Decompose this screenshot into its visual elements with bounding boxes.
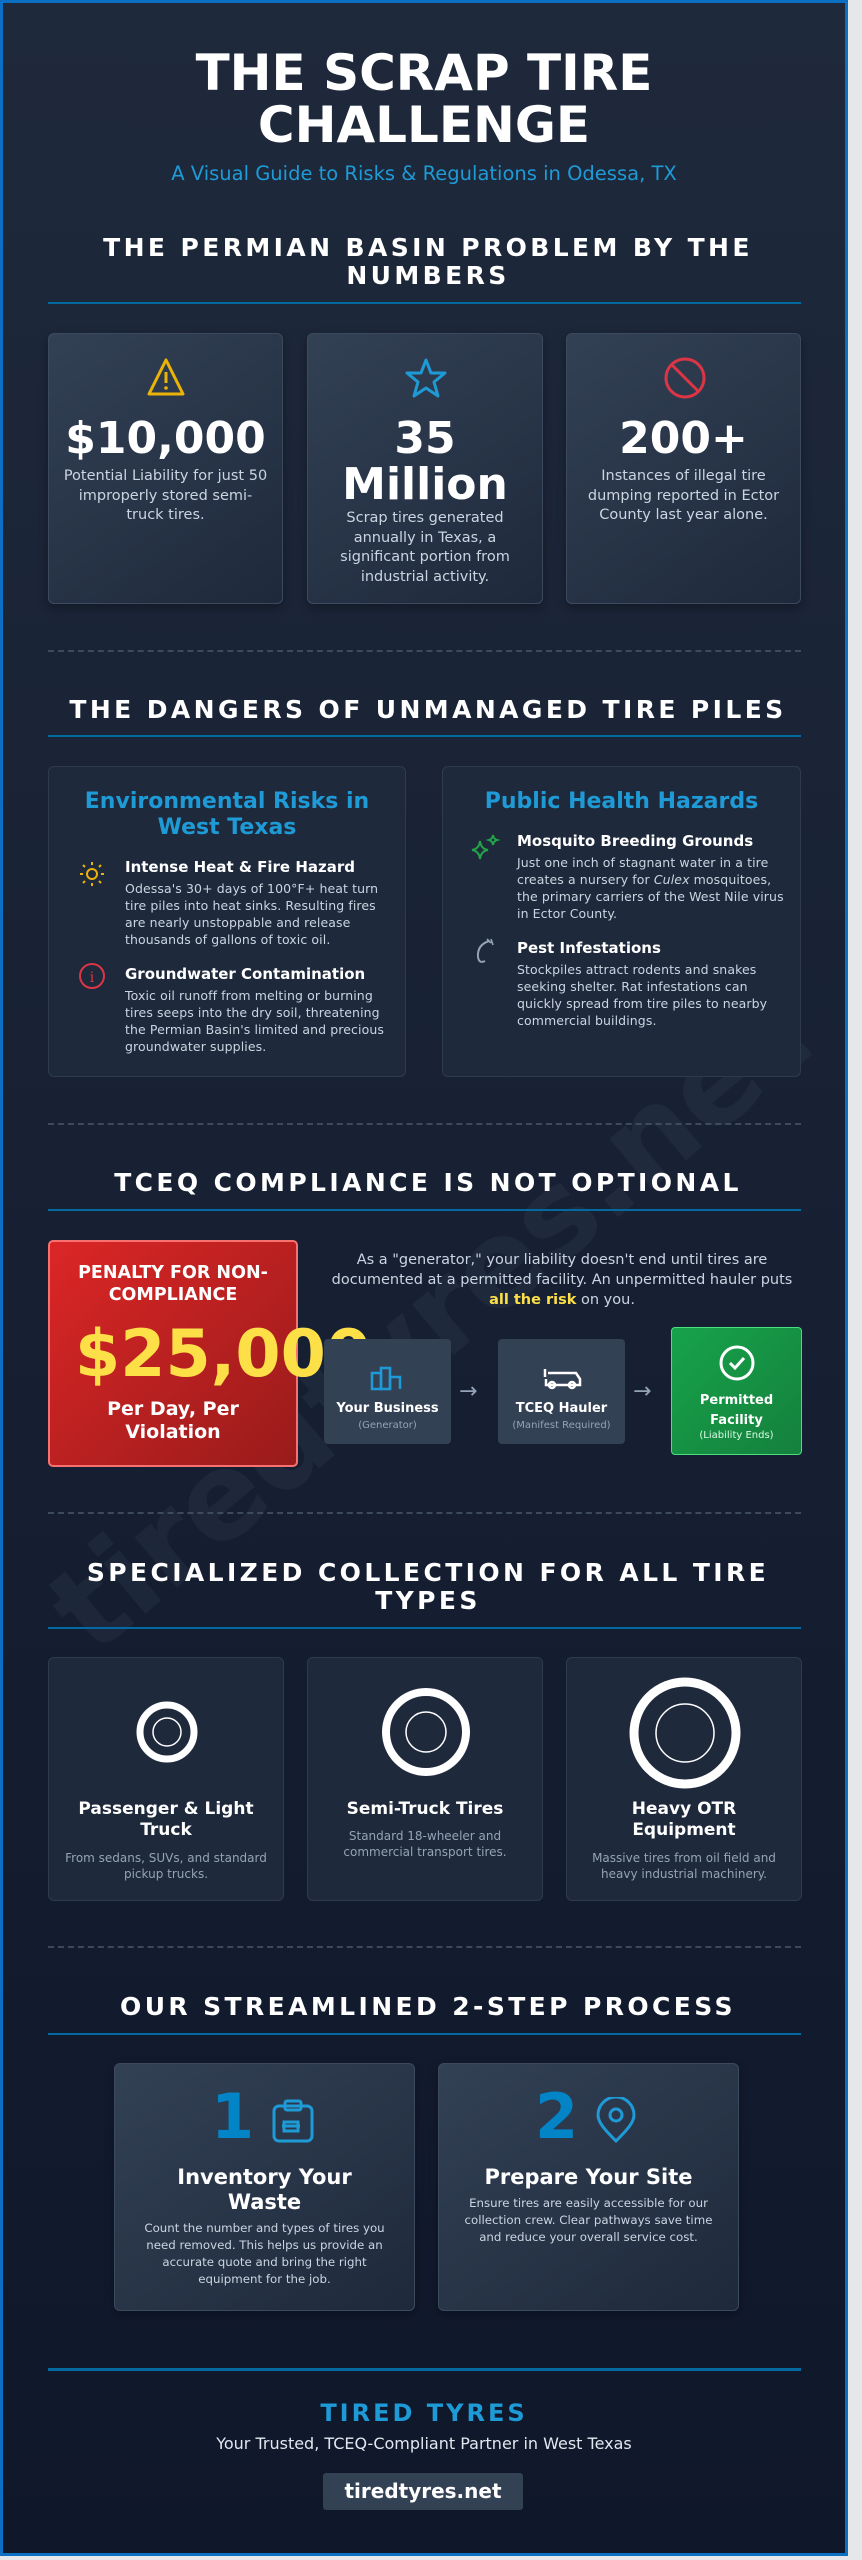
footer line [48,2368,801,2371]
tire card: passenger: From sedans, SUVs, and standard pickup trucks. [65,1851,267,1881]
panel: environmental: Groundwater Contamination [125,965,365,983]
icon: sparkles [472,834,500,860]
icon: building [370,1366,402,1390]
heading: numbers: THE PERMIAN BASIN PROBLEM BY THE NUMBERS [103,233,753,290]
icon: clipboard [272,2100,314,2142]
panel: environmental: Toxic oil runoff from melting or burning tires seeps into the dry soil, threatening the Permian Basin's limited and precious groundwater supplies. [125,988,384,1054]
tire card: passenger [48,1657,284,1901]
step 1: Waste [228,2190,301,2214]
footer: brand: TIRED TYRES [320,2399,528,2427]
arrow: → [633,1379,651,1404]
step 1: Inventory Your [177,2165,352,2189]
tire card: passenger: Passenger & Light [78,1799,254,1819]
footer: url pill: tiredtyres.net [344,2479,502,2503]
tire card: semi: Standard 18-wheeler and commercial transport tires. [343,1829,507,1859]
panel: health: Stockpiles attract rodents and snakes seeking shelter. Rat infestations can quickly spread from tire piles to nearby commercial buildings. [517,962,767,1028]
stat card 1: Potential Liability for just 50 improperly stored semi-truck tires. [64,468,267,523]
panel: environmental: Odessa's 30+ days of 100°F+ heat turn tire piles into heat sinks. Resulting fires are nearly unstoppable and release thousands of gallons of toxic oil. [125,881,378,947]
penalty box: PENALTY FOR NON- [78,1263,268,1283]
stat card 3 [566,333,801,604]
icon: small tire [136,1702,198,1762]
step 1: Count the number and types of tires you need removed. This helps us provide an accurate quote and bring the right equipment for the job. [144,2221,385,2286]
flow: business: (Generator) [358,1420,417,1431]
panel: health: Public Health Hazards [485,789,758,814]
stat card 2 [307,333,543,604]
arrow: → [459,1379,477,1404]
panel: environmental [48,766,406,1077]
flow: hauler: TCEQ Hauler [516,1401,607,1416]
penalty amount: $25,000 [75,1317,371,1392]
panel: environmental: West Texas [158,815,296,840]
paragraph: As a "generator," your liability doesn't end until tires are documented at a permitted facility. An unpermitted hauler puts all the risk on you. [332,1252,792,1308]
icon: warning [148,358,184,396]
tire card: OTR [566,1657,802,1901]
panel: health: Just one inch of stagnant water in a tire creates a nursery for Culex mosquitoes, the primary carriers of the West Nile virus in Ector County. [517,855,784,921]
heading: dangers: THE DANGERS OF UNMANAGED TIRE PILES [69,695,787,724]
icon: medium tire [382,1688,470,1776]
icon: truck [544,1369,582,1390]
icon: pest [476,938,494,963]
footer: url pill [323,2473,523,2510]
panel: environmental: Environmental Risks in [85,789,369,814]
step 2: Prepare Your Site [484,2165,693,2189]
icon: large tire [630,1678,740,1788]
title: THE SCRAP TIRE [196,44,652,102]
icon: info [79,963,105,989]
flow: permitted facility: Permitted [700,1393,773,1408]
stat card 1: $10,000 [65,413,266,464]
icon: prohibited [664,358,706,398]
panel: health: Mosquito Breeding Grounds [517,832,753,850]
step 1 [114,2063,415,2311]
stat card 1 [48,333,283,604]
footer: tagline: Your Trusted, TCEQ-Compliant Partner in West Texas [216,2434,632,2453]
icon: sun [80,862,104,886]
stat card 2: 35 [394,413,456,464]
flow: hauler [498,1339,625,1444]
penalty box: Per Day, Per [107,1398,239,1420]
tire card: semi [307,1657,543,1901]
subtitle: A Visual Guide to Risks & Regulations in Odessa, TX [171,162,677,185]
tire card: semi: Semi-Truck Tires [347,1799,503,1819]
heading: TCEQ: TCEQ COMPLIANCE IS NOT OPTIONAL [114,1168,742,1197]
flow: permitted facility: Facility [710,1413,763,1428]
panel: health: Pest Infestations [517,939,661,957]
tire card: OTR: Massive tires from oil field and heavy industrial machinery. [592,1851,776,1881]
stat card 2: Scrap tires generated annually in Texas, a significant portion from industrial activity. [340,510,510,584]
title: CHALLENGE [258,96,590,154]
step 1: 1 [211,2080,254,2153]
heading: process: OUR STREAMLINED 2-STEP PROCESS [120,1992,736,2021]
panel: health [442,766,801,1077]
icon: location pin [596,2097,636,2143]
tire card: OTR: Heavy OTR [632,1799,736,1819]
icon: info: i [90,970,95,986]
flow: business [324,1339,451,1444]
panel: environmental: Intense Heat & Fire Hazard [125,858,355,876]
step 2: 2 [535,2080,578,2153]
flow: business: Your Business [336,1401,439,1416]
stat card 3: 200+ [619,413,748,464]
stat card 3: Instances of illegal tire dumping reported in Ector County last year alone. [588,468,779,523]
flow: permitted facility [671,1327,802,1455]
flow: hauler: (Manifest Required) [512,1420,611,1431]
stat card 2: Million [342,459,508,510]
step 2 [438,2063,739,2311]
title [196,44,652,154]
step 2: Ensure tires are easily accessible for our collection crew. Clear pathways save time and reduce your overall service cost. [465,2196,712,2244]
icon: check [720,1346,754,1380]
heading: tire types: SPECIALIZED COLLECTION FOR ALL TIRE TYPES [87,1558,769,1615]
penalty box [48,1240,298,1467]
icon: star [406,358,446,398]
tire card: OTR: Equipment [632,1820,736,1840]
watermark: tiredtyres.net [23,967,834,1679]
penalty box: Violation [125,1421,221,1443]
flow: permitted facility: (Liability Ends) [699,1430,774,1441]
penalty box: COMPLIANCE [109,1285,237,1305]
tire card: passenger: Truck [140,1820,192,1840]
